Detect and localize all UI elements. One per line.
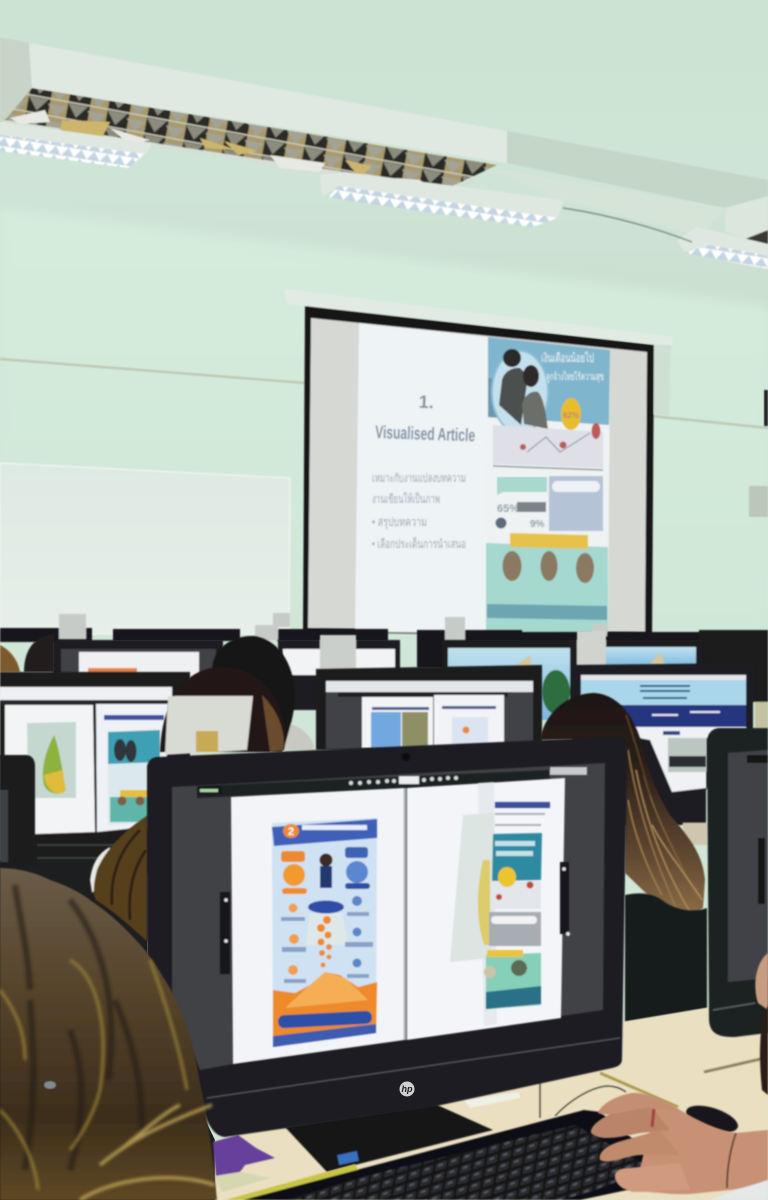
teal foot block (486, 953, 541, 1009)
header strokes (372, 707, 429, 710)
wall (0, 208, 768, 720)
header number circle (283, 824, 299, 838)
pill label (491, 916, 537, 924)
circle icon (511, 960, 527, 976)
percentage: 62% (563, 411, 579, 420)
teal lower block (486, 543, 608, 634)
side handle (758, 838, 765, 904)
back monitor 2 (113, 629, 240, 641)
yellow square (196, 731, 218, 752)
grey bar one (517, 502, 546, 512)
wall band lines (0, 359, 768, 428)
main foreground monitor (147, 737, 627, 1137)
ring finger (600, 1130, 680, 1162)
happiness panel (549, 476, 603, 531)
purple object (213, 1135, 275, 1192)
hair highlight (262, 695, 284, 752)
toolbar (0, 700, 168, 705)
second row right monitor (572, 663, 753, 845)
desk lines below monitor (37, 845, 127, 858)
white reflections (10, 110, 430, 188)
footer band (273, 1024, 376, 1047)
back monitor 1 (0, 628, 92, 642)
group photo (668, 738, 707, 772)
falling coins (317, 916, 332, 968)
desk clutter (215, 1172, 270, 1192)
hair mass (0, 868, 217, 1200)
white heading line (495, 841, 535, 846)
browser bar (0, 687, 172, 700)
projected infographic (486, 337, 610, 634)
right lit panel (684, 245, 768, 269)
right side icons (352, 896, 362, 968)
toolbar buttons (349, 776, 458, 785)
left page (362, 697, 433, 748)
right page (96, 704, 168, 832)
monitor body (572, 663, 753, 825)
screen roller casing (284, 289, 672, 346)
paper card centre (320, 635, 356, 669)
map block (402, 712, 428, 748)
chart base line (493, 466, 603, 470)
right box louvre (740, 230, 768, 246)
sky image (604, 647, 696, 668)
dark strands (15, 885, 142, 1170)
dark screen area (172, 763, 605, 1070)
infographic page (486, 337, 610, 634)
ring (652, 1109, 654, 1127)
right lit panel housing (677, 227, 768, 256)
grey panel (489, 912, 541, 946)
logo tag (747, 755, 768, 763)
page spine (404, 788, 406, 1040)
circle icon left (484, 966, 496, 978)
gold reflections (60, 120, 372, 178)
logo tag (198, 786, 222, 794)
blue header (488, 337, 610, 425)
slide white area (355, 323, 610, 634)
navy band labels (652, 711, 720, 716)
back monitor 5 (522, 632, 702, 642)
shirt (285, 722, 314, 750)
infographic image (108, 730, 160, 825)
yellow ribbon (120, 790, 160, 797)
browser bar (326, 681, 533, 692)
building (508, 655, 534, 690)
hair lower (94, 815, 148, 942)
orange piggy bank (282, 864, 307, 894)
hair (760, 1005, 768, 1095)
slide heading: Visualised Article (375, 422, 475, 445)
toolbar strip (197, 770, 550, 798)
9 percent label: 9% (530, 519, 545, 530)
slide body text: • สรุปบทความ (372, 515, 427, 530)
yellow banana stripe (478, 860, 490, 945)
side icons (288, 904, 299, 975)
monitor left (53, 640, 223, 676)
key grid (285, 1125, 650, 1200)
hair lower strands (112, 830, 146, 920)
ceiling lights (0, 37, 768, 269)
partition paper cards (59, 613, 607, 641)
bracelet (727, 1133, 736, 1188)
teal header block (492, 833, 542, 881)
man figure (499, 349, 528, 425)
stand base (285, 1104, 493, 1172)
line chart (527, 433, 590, 452)
back row monitors (0, 613, 768, 728)
main fixture front face (29, 43, 507, 163)
circle icons (118, 796, 144, 806)
dark band (488, 378, 545, 422)
infographic header bar (104, 715, 164, 720)
infographic on left page (272, 818, 377, 1047)
monitor stand (285, 1104, 493, 1172)
text lines (495, 813, 545, 826)
whiteboard (0, 463, 290, 634)
monitor body (278, 640, 400, 710)
couple (114, 739, 136, 762)
underside panel of beam (490, 168, 725, 236)
inset infographic on right page (450, 802, 550, 1009)
light beam (306, 913, 348, 945)
toolbar (338, 692, 508, 697)
screen (0, 790, 8, 862)
monitor right (576, 640, 702, 668)
yellow desk edge (600, 1073, 678, 1107)
teal ribbon (497, 477, 547, 495)
hair upper (160, 667, 286, 752)
blue piggy bank (345, 861, 370, 889)
monitor centre (278, 640, 400, 710)
brown hair (0, 645, 20, 672)
coin pile and orange base (273, 972, 377, 1047)
seated person with paper card (90, 667, 286, 942)
header label (302, 825, 367, 830)
slide number: 1. (418, 392, 434, 412)
infographic subtitle: ลูกจ้างไทยไร้ความสุข (546, 371, 604, 383)
left page (231, 788, 404, 1064)
seated person with long hair (540, 693, 705, 920)
left lit panel housing (0, 122, 152, 154)
monitor body (316, 665, 542, 750)
monitor screen (283, 649, 395, 675)
webcam (402, 753, 410, 761)
desk strip far right (755, 702, 768, 728)
projected slide (355, 323, 610, 634)
teal image box (27, 722, 76, 798)
blue tag (663, 731, 680, 735)
browser strip (581, 675, 746, 680)
monitor with campus website (442, 640, 576, 720)
tree (542, 670, 570, 714)
HP logo (400, 1082, 414, 1096)
lower circle icons (502, 551, 594, 583)
header banner (272, 819, 377, 846)
building (648, 652, 666, 667)
green tag dot (200, 789, 218, 792)
office chair (625, 893, 707, 1022)
typing hand (591, 1093, 768, 1200)
right page header stroke (442, 706, 496, 709)
ceiling beam (507, 131, 768, 208)
monitor body (147, 737, 627, 1137)
right handle dots (562, 867, 570, 936)
second row left monitor (0, 672, 190, 887)
speaker at right edge (764, 390, 768, 426)
right roller drop (654, 345, 671, 416)
strands (626, 715, 702, 915)
HP logo: hp (402, 1084, 413, 1094)
third row monitors (53, 631, 702, 720)
orange dot (462, 726, 470, 734)
yellow ribbon (510, 533, 588, 549)
orange label (281, 851, 305, 862)
funnel top disc (308, 900, 344, 914)
navy band (581, 705, 746, 727)
top toolbar (197, 767, 587, 798)
seated person back row left (0, 634, 54, 672)
pale overlay sheet (450, 813, 494, 962)
person at right edge (755, 953, 768, 1095)
centre lit panel (328, 186, 558, 227)
monitor body (576, 640, 702, 668)
monitor body (53, 640, 223, 676)
screen (326, 681, 533, 749)
paper on desk (464, 1092, 520, 1108)
slide body text: งานเขียนให้เป็นภาพ (372, 491, 440, 506)
desk glimpse beyond monitor (683, 823, 707, 845)
back monitor 3 (277, 629, 388, 641)
sleeve (710, 1178, 768, 1200)
pages (79, 652, 199, 676)
sky image (448, 648, 570, 720)
caption pill (278, 1011, 372, 1028)
blue website header (581, 675, 746, 705)
hair (210, 636, 295, 750)
slide body text: เหมาะกับงานแปลงบทความ (372, 471, 466, 485)
middle finger (591, 1105, 670, 1138)
yellow circle (498, 867, 516, 887)
blond tips (80, 1105, 215, 1200)
document pages (231, 778, 565, 1064)
right upper box (725, 196, 768, 246)
right page (434, 695, 504, 748)
white page (581, 727, 746, 792)
paper card (165, 696, 253, 755)
person (320, 854, 332, 888)
orange strip (88, 668, 137, 676)
back monitor 4 (417, 630, 522, 668)
wall switch box (749, 486, 768, 517)
thumb (615, 1163, 690, 1192)
dark footer strip (486, 986, 541, 1009)
window button (550, 767, 587, 775)
banana illustration (43, 735, 66, 794)
left lit panel (0, 135, 145, 168)
number two: 2 (288, 826, 294, 838)
yellow ruler (225, 1164, 358, 1200)
chin line (713, 1003, 755, 1010)
projector screen (284, 289, 672, 637)
ceiling (0, 0, 768, 312)
index finger (598, 1093, 682, 1114)
screen (728, 750, 768, 982)
hair (540, 693, 705, 920)
second row centre monitor (316, 665, 542, 750)
woman figure (522, 365, 548, 429)
desk shadow stroke (704, 1058, 765, 1072)
golden strands (0, 960, 187, 1190)
teal foot block (110, 797, 160, 822)
65 percent label: 65% (497, 503, 519, 515)
front left monitor (0, 755, 35, 870)
pale panel behind chart (493, 425, 603, 468)
right page infographic (452, 717, 488, 748)
left page (5, 705, 95, 835)
backing behind foreground person (0, 860, 215, 1200)
left handle (220, 892, 230, 974)
keyboard (225, 1110, 667, 1200)
second heading line (496, 851, 533, 856)
louvre grid of main fixture (5, 88, 497, 188)
arm and palm (631, 1100, 768, 1194)
students row (669, 756, 706, 767)
pale chart panel (491, 881, 541, 909)
monitor body (442, 640, 576, 710)
yellow percentage circle (561, 398, 581, 430)
cables (540, 1082, 626, 1118)
couple illustration circle (492, 351, 548, 433)
desk top (215, 1008, 768, 1200)
face icon (496, 518, 506, 528)
side scroller handles (220, 862, 570, 974)
monitor body (707, 728, 768, 1037)
sticker (337, 1151, 359, 1165)
slide body text: • เลือกประเด็นการนำเสนอ (372, 536, 466, 551)
blue infographic block (371, 712, 401, 748)
right page (407, 778, 565, 1040)
main fixture side face (0, 37, 32, 126)
left handle dots (224, 898, 228, 943)
infographic background (272, 818, 377, 1047)
chin highlight (207, 1038, 620, 1098)
slide body text (372, 471, 466, 551)
foreground person hair (0, 868, 217, 1200)
desk (215, 1008, 768, 1200)
back monitor far right (699, 630, 768, 702)
monitor screen (61, 649, 216, 676)
screen surface (308, 318, 647, 632)
red pins (496, 882, 534, 900)
right partial monitor (707, 728, 768, 1037)
blue top block (108, 730, 160, 764)
monitor body (0, 755, 35, 870)
lower lip of main fixture (0, 120, 470, 195)
footer band (487, 604, 607, 620)
computer mouse (683, 1100, 741, 1138)
yellow ribbon (487, 950, 523, 957)
screen frame (303, 306, 654, 637)
monitor body (0, 672, 190, 887)
coin pile highlight (285, 972, 368, 1008)
blue label (345, 847, 368, 858)
seated person with black hair (210, 636, 314, 750)
keyboard body (243, 1110, 667, 1200)
paper card right (577, 631, 606, 666)
centre lit panel housing (320, 172, 563, 218)
right handle (560, 862, 569, 934)
banana lower yellow (44, 770, 66, 794)
panel pill (552, 481, 600, 492)
website heading (640, 685, 690, 699)
red pins (520, 423, 600, 450)
infographic title: เงินเดือนน้อยไป (541, 351, 594, 365)
hair clip (44, 1081, 56, 1089)
cheek (755, 953, 768, 1010)
conduit cable (563, 208, 692, 242)
page fold shadow (478, 782, 497, 1026)
caption lines (281, 912, 373, 983)
blue rule (495, 802, 550, 808)
white collar (90, 847, 110, 893)
dark hair (24, 634, 54, 672)
